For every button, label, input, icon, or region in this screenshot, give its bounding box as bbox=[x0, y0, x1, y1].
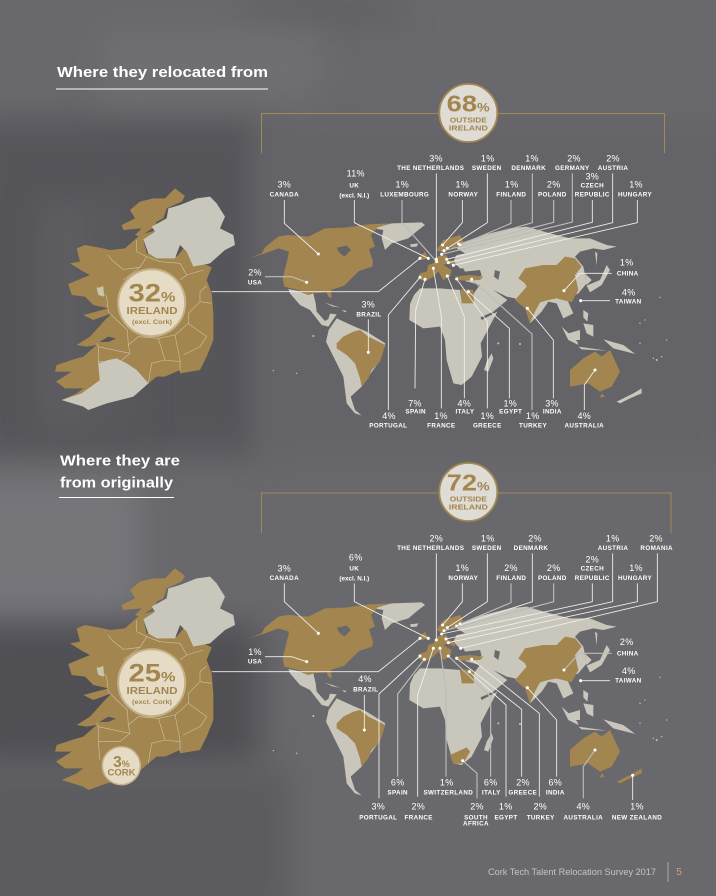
label: Switzerland 1%: SWITZERLAND bbox=[423, 790, 473, 797]
label: UK 6%: 6% bbox=[349, 553, 363, 563]
leader lines: relocated from bbox=[212, 173, 637, 410]
label: Canada 3%: CANADA bbox=[270, 575, 299, 582]
label: China 1%: CHINA bbox=[617, 270, 639, 277]
label: Finland 1%: 1% bbox=[505, 179, 519, 189]
label: Australia 4%: 4% bbox=[577, 411, 591, 421]
label: UK 6%: (excl. N.I.) bbox=[339, 576, 369, 583]
label: Canada 3%: CANADA bbox=[270, 192, 299, 199]
label: Turkey 1%: TURKEY bbox=[519, 422, 547, 429]
label: Germany 2%: GERMANY bbox=[555, 165, 590, 172]
label: Czech Republic 3%: REPUBLIC bbox=[575, 192, 610, 199]
label: Czech Republic 3%: 3% bbox=[585, 171, 599, 181]
label: Canada 3%: 3% bbox=[277, 564, 291, 574]
label: Spain 7%: 7% bbox=[408, 399, 422, 409]
badge: 25% Ireland excl. Cork: 25 % bbox=[128, 660, 176, 688]
badge: 3% Cork bbox=[102, 747, 140, 785]
label: New Zealand 1%: 1% bbox=[630, 801, 644, 811]
label: Hungary 1%: 1% bbox=[629, 179, 643, 189]
label: Greece 2%: 2% bbox=[516, 778, 530, 788]
label: Poland 2%: 2% bbox=[547, 563, 561, 573]
map: world, where they are from originally bbox=[212, 553, 667, 800]
label: New Zealand 1%: NEW ZEALAND bbox=[612, 814, 662, 821]
label: Denmark 1%: 1% bbox=[525, 154, 539, 164]
label: Brazil 4%: 4% bbox=[358, 674, 372, 684]
label: India 3%: INDIA bbox=[543, 409, 562, 416]
label: Hungary 1%: 1% bbox=[629, 563, 643, 573]
label: Greece 1%: GREECE bbox=[473, 422, 502, 429]
label: China 2%: CHINA bbox=[617, 650, 639, 657]
map: Ireland, where they are from originally bbox=[55, 568, 235, 790]
badge: 25% Ireland excl. Cork: (excl. Cork) bbox=[132, 699, 172, 706]
label: China 2%: 2% bbox=[620, 637, 634, 647]
label: Romania 2%: 2% bbox=[649, 534, 663, 544]
label: China 1%: 1% bbox=[620, 258, 634, 268]
label: The Netherlands 2%: 2% bbox=[429, 534, 443, 544]
label: Denmark 2%: DENMARK bbox=[514, 545, 548, 552]
label: Finland 2%: 2% bbox=[504, 563, 518, 573]
label: Egypt 1%: 1% bbox=[499, 801, 513, 811]
label: UK 6%: UK bbox=[349, 566, 359, 573]
badge: 72% outside Ireland: 72 % bbox=[447, 470, 490, 496]
bracket: outside Ireland 72% bbox=[262, 493, 671, 533]
label: Taiwan 4%: 4% bbox=[622, 666, 636, 676]
badge: 68% outside Ireland bbox=[439, 84, 497, 142]
label: Czech Republic 2%: 2% bbox=[585, 555, 599, 565]
label: Romania 2%: ROMANIA bbox=[640, 545, 673, 552]
label: Italy 6%: 6% bbox=[484, 778, 498, 788]
title: Where they relocated from: Where they relocated from bbox=[57, 64, 268, 81]
label: South Africa 2%: 2% bbox=[470, 801, 484, 811]
title: Where they are from originally: Where they are bbox=[60, 452, 180, 470]
label: Austria 1%: AUSTRIA bbox=[598, 545, 628, 552]
label: Italy 6%: ITALY bbox=[482, 790, 501, 797]
label: India 3%: 3% bbox=[545, 399, 559, 409]
label: Taiwan 4%: TAIWAN bbox=[615, 298, 642, 305]
label: Norway 1%: 1% bbox=[455, 179, 469, 189]
label: USA 2%: USA bbox=[248, 279, 262, 286]
label: Australia 4%: AUSTRALIA bbox=[565, 422, 604, 429]
label: UK 11%: 11% bbox=[347, 169, 365, 179]
label: Italy 4%: ITALY bbox=[456, 409, 475, 416]
label: Germany 2%: 2% bbox=[567, 154, 581, 164]
label: Greece 1%: 1% bbox=[480, 411, 494, 421]
label: UK 11%: (excl. N.I.) bbox=[339, 192, 369, 199]
label: Sweden 1%: SWEDEN bbox=[472, 165, 502, 172]
label: Taiwan 4%: TAIWAN bbox=[615, 677, 642, 684]
title: Where they are from originally bbox=[59, 452, 180, 498]
label: Norway 1%: NORWAY bbox=[448, 575, 479, 582]
leader lines: from originally bbox=[212, 553, 657, 800]
badge: 72% outside Ireland: OUTSIDE bbox=[450, 495, 487, 504]
label: Norway 1%: 1% bbox=[455, 563, 469, 573]
label: Portugal 3%: PORTUGAL bbox=[359, 814, 397, 821]
footer: survey name and page number bbox=[488, 862, 682, 882]
map: world, where they relocated from bbox=[212, 173, 667, 415]
badge: 68% outside Ireland: OUTSIDE bbox=[450, 116, 487, 125]
label: Denmark 1%: DENMARK bbox=[511, 165, 546, 172]
label: India 6%: INDIA bbox=[546, 790, 565, 797]
label: Brazil 4%: BRAZIL bbox=[353, 687, 378, 694]
badge: 3% Cork: CORK bbox=[108, 768, 136, 778]
label: Italy 4%: 4% bbox=[457, 399, 471, 409]
label: Brazil 3%: 3% bbox=[361, 300, 375, 310]
title: Where they are from originally: from originally bbox=[60, 474, 174, 492]
label: Canada 3%: 3% bbox=[277, 179, 291, 189]
bracket: outside Ireland 68% bbox=[262, 114, 664, 153]
label: France 2%: 2% bbox=[411, 801, 425, 811]
label: Spain 6%: SPAIN bbox=[387, 790, 408, 797]
badge: 72% outside Ireland: IRELAND bbox=[449, 502, 488, 511]
label: Poland 2%: POLAND bbox=[538, 192, 567, 199]
label: Finland 1%: FINLAND bbox=[496, 192, 526, 199]
label: Portugal 3%: 3% bbox=[371, 801, 385, 811]
label: Sweden 1%: SWEDEN bbox=[472, 545, 502, 552]
badge: 32% Ireland excl. Cork: (excl. Cork) bbox=[132, 319, 172, 326]
label: Czech Republic 2%: CZECH bbox=[581, 566, 604, 573]
label: South Africa 2%: SOUTH bbox=[464, 814, 488, 821]
badge: 72% outside Ireland bbox=[439, 463, 497, 521]
badge: 68% outside Ireland: IRELAND bbox=[449, 123, 488, 132]
label: France 2%: FRANCE bbox=[405, 814, 433, 821]
label: France 1%: FRANCE bbox=[427, 422, 455, 429]
label: Taiwan 4%: 4% bbox=[622, 288, 636, 298]
label: Finland 2%: FINLAND bbox=[496, 575, 526, 582]
label: Austria 1%: 1% bbox=[606, 534, 620, 544]
label: Hungary 1%: HUNGARY bbox=[618, 575, 652, 582]
label: Hungary 1%: HUNGARY bbox=[618, 192, 652, 199]
label: Poland 2%: 2% bbox=[547, 179, 561, 189]
label: Luxembourg 1%: 1% bbox=[395, 179, 409, 189]
label: Turkey 1%: 1% bbox=[526, 411, 540, 421]
label: Brazil 3%: BRAZIL bbox=[356, 312, 382, 319]
label: India 6%: 6% bbox=[548, 778, 562, 788]
footer: survey name and page number: Cork Tech Talent Relocation Survey 2017 bbox=[488, 867, 656, 878]
label: USA 1%: 1% bbox=[248, 647, 262, 657]
label: Sweden 1%: 1% bbox=[481, 154, 495, 164]
label: Australia 4%: 4% bbox=[576, 801, 590, 811]
footer: survey name and page number: 5 bbox=[676, 867, 682, 878]
label: Switzerland 1%: 1% bbox=[440, 778, 454, 788]
label: Egypt 1%: 1% bbox=[503, 399, 517, 409]
label: Portugal 4%: 4% bbox=[382, 411, 396, 421]
label: Spain 7%: SPAIN bbox=[405, 409, 426, 416]
label: Egypt 1%: EGYPT bbox=[499, 409, 522, 416]
badge: 32% Ireland excl. Cork bbox=[118, 269, 185, 336]
label: Austria 2%: AUSTRIA bbox=[598, 165, 628, 172]
label: The Netherlands 3%: 3% bbox=[429, 154, 443, 164]
label: Denmark 2%: 2% bbox=[528, 534, 542, 544]
label: USA 2%: 2% bbox=[248, 268, 262, 278]
label: Norway 1%: NORWAY bbox=[448, 192, 479, 199]
label: Egypt 1%: EGYPT bbox=[494, 814, 518, 821]
label: Austria 2%: 2% bbox=[606, 154, 620, 164]
badge: 3% Cork: 3% bbox=[113, 754, 130, 771]
badge: 25% Ireland excl. Cork: IRELAND bbox=[126, 686, 178, 697]
label: Czech Republic 2%: REPUBLIC bbox=[575, 575, 610, 582]
label: UK 11%: UK bbox=[349, 183, 359, 190]
label: USA 1%: USA bbox=[248, 658, 262, 665]
label: The Netherlands 3%: THE NETHERLANDS bbox=[397, 165, 464, 172]
label: Australia 4%: AUSTRALIA bbox=[564, 814, 603, 821]
badge: 32% Ireland excl. Cork: IRELAND bbox=[126, 306, 178, 317]
label: Luxembourg 1%: LUXEMBOURG bbox=[380, 192, 429, 199]
label: Turkey 2%: 2% bbox=[533, 801, 547, 811]
label: Poland 2%: POLAND bbox=[538, 575, 567, 582]
label: The Netherlands 2%: THE NETHERLANDS bbox=[397, 545, 464, 552]
label: South Africa 2%: AFRICA bbox=[463, 821, 489, 828]
badge: 68% outside Ireland: 68 % bbox=[447, 91, 490, 117]
map: Ireland, where they relocated from bbox=[55, 188, 235, 410]
label: Czech Republic 3%: CZECH bbox=[581, 182, 604, 189]
label: Greece 2%: GREECE bbox=[508, 790, 537, 797]
label: Turkey 2%: TURKEY bbox=[527, 814, 555, 821]
label: Spain 6%: 6% bbox=[391, 778, 405, 788]
badge: 25% Ireland excl. Cork bbox=[118, 649, 185, 716]
badge: 32% Ireland excl. Cork: 32 % bbox=[128, 280, 176, 308]
label: Portugal 4%: PORTUGAL bbox=[369, 422, 407, 429]
label: France 1%: 1% bbox=[434, 411, 448, 421]
label: Sweden 1%: 1% bbox=[481, 534, 495, 544]
